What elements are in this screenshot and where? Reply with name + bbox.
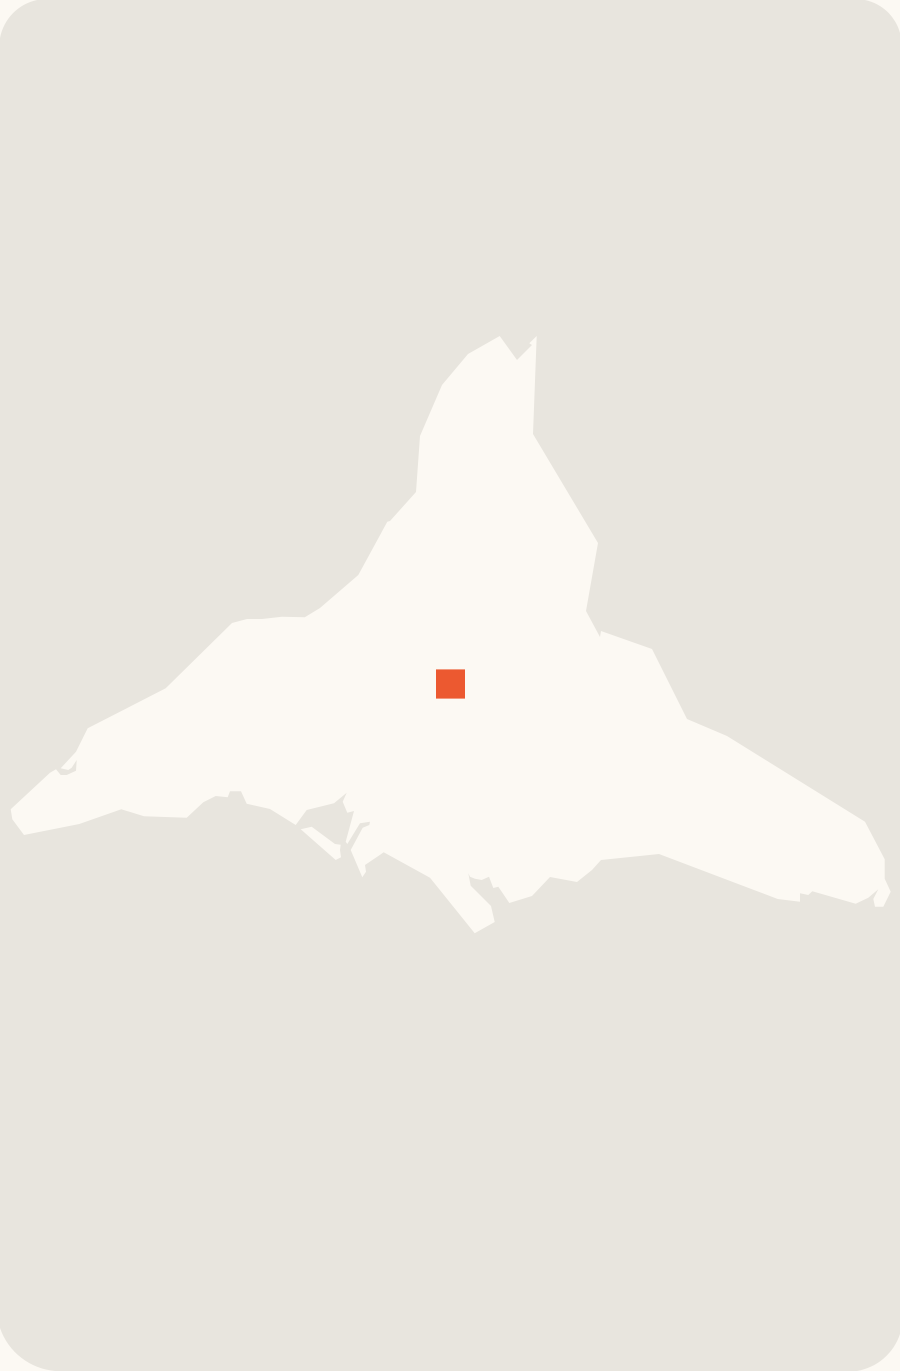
marker: orange square	[436, 669, 465, 699]
map: small island	[301, 827, 341, 860]
map: land silhouette	[11, 336, 891, 933]
map: mainland shape	[11, 336, 891, 933]
